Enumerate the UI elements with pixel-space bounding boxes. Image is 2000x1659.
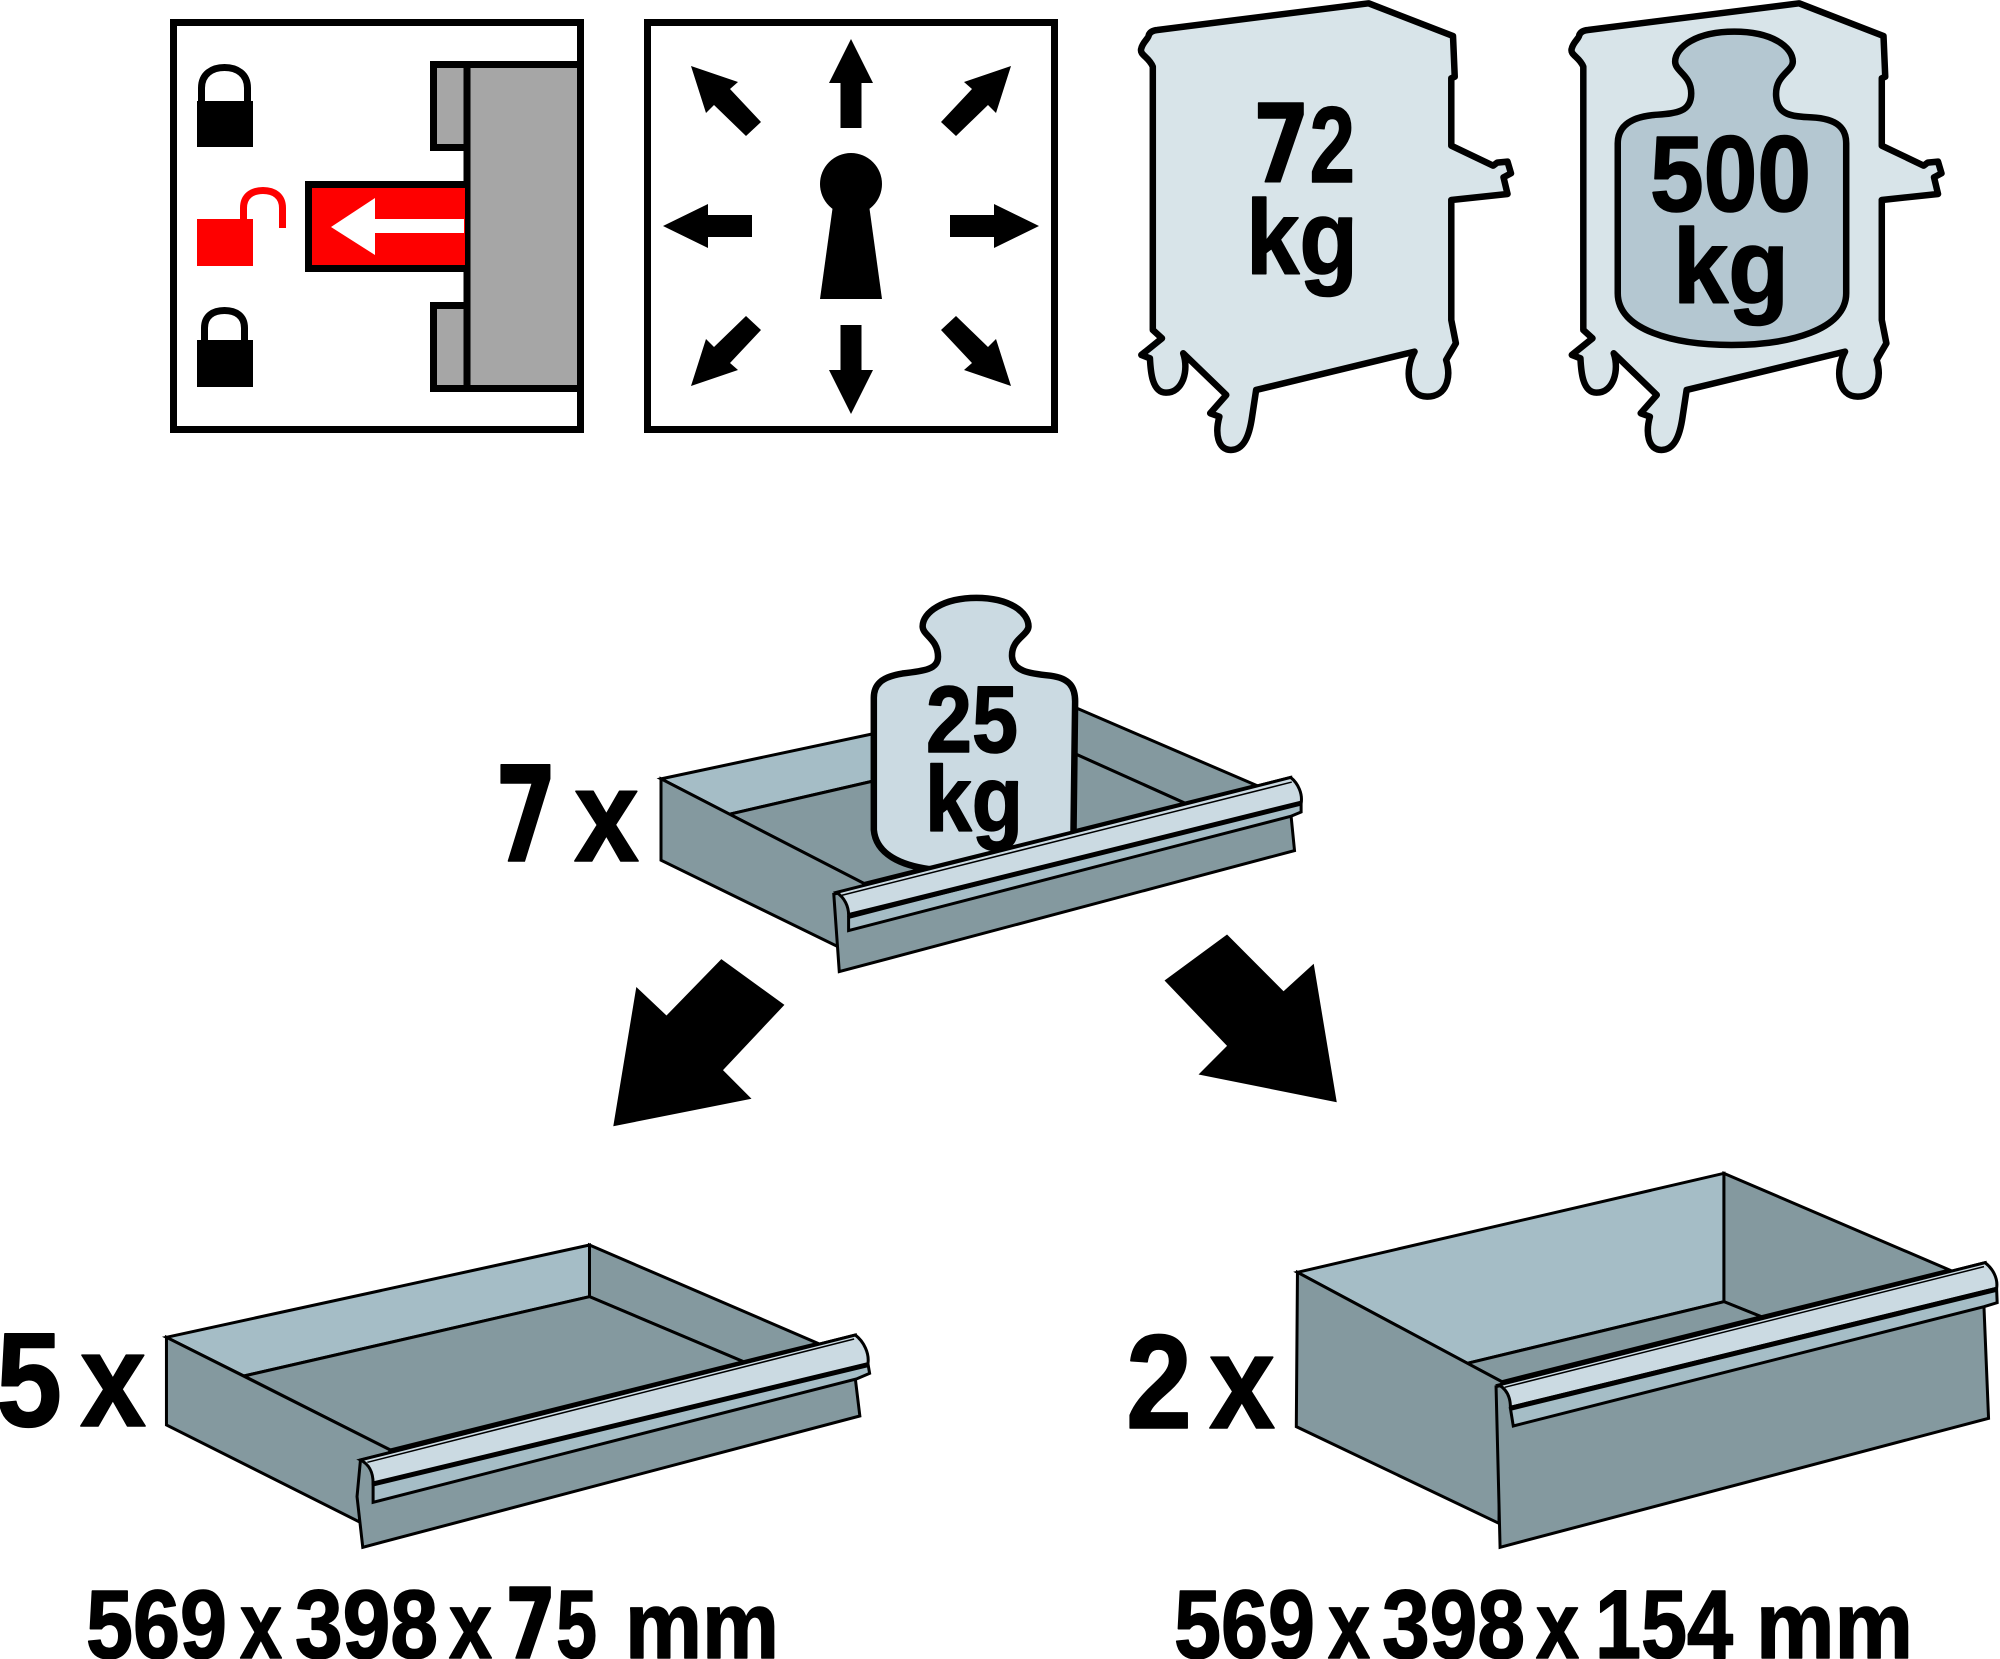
cabinet with 500 kg load weight bbox=[1571, 3, 1941, 450]
cabinet 72 kg bbox=[1141, 3, 1511, 450]
weight label 72 kg: 72 bbox=[1253, 83, 1355, 208]
weight 25 kg bbox=[874, 598, 1075, 869]
arrows in eight directions bbox=[663, 39, 1039, 414]
weight shape bbox=[1618, 32, 1846, 345]
quantity label 2 x bbox=[1126, 1308, 1275, 1457]
quantity label 5 x: x bbox=[80, 1306, 146, 1455]
cabinet side with drawer pulled out bbox=[430, 61, 580, 392]
weight 25 kg: 25 bbox=[926, 667, 1018, 773]
icon: keyhole bbox=[820, 153, 882, 299]
weight label 72 kg: kg bbox=[1246, 179, 1358, 297]
panel: central locking bbox=[174, 22, 580, 430]
weight label 500 kg: kg bbox=[1673, 208, 1789, 326]
arrow: down left bbox=[613, 959, 784, 1126]
icon: closed padlock bottom bbox=[197, 310, 253, 387]
arrow: down right bbox=[1165, 935, 1337, 1102]
deep drawer bbox=[1296, 1173, 1997, 1547]
weight 25 kg: kg bbox=[925, 747, 1023, 851]
dimensions: 569 x 398 x 154 mm bbox=[1174, 1570, 1913, 1659]
quantity label 7 x: 7 bbox=[495, 739, 557, 893]
shallow drawer bbox=[166, 1245, 870, 1547]
quantity label 7 x bbox=[495, 739, 639, 893]
quantity label 2 x: x bbox=[1209, 1308, 1275, 1457]
weight label 500 kg bbox=[1650, 113, 1811, 326]
red open drawer with white arrow bbox=[308, 184, 465, 268]
front panel and handle bbox=[1496, 1263, 1997, 1547]
quantity label 2 x: 2 bbox=[1126, 1308, 1192, 1457]
weight label 72 kg bbox=[1246, 83, 1358, 297]
central drawer with 25 kg weight bbox=[661, 598, 1301, 972]
front panel and handle bbox=[834, 777, 1301, 972]
quantity label 5 x bbox=[0, 1306, 146, 1455]
dimensions: 569 x 398 x 75 mm bbox=[86, 1568, 779, 1659]
icon: closed padlock top bbox=[197, 68, 253, 147]
icon: open padlock red bbox=[197, 190, 282, 266]
front panel and handle bbox=[357, 1335, 870, 1547]
panel: keyhole with eight directions bbox=[648, 22, 1054, 430]
quantity label 7 x: x bbox=[574, 742, 639, 889]
weight label 500 kg: 500 bbox=[1650, 113, 1811, 234]
